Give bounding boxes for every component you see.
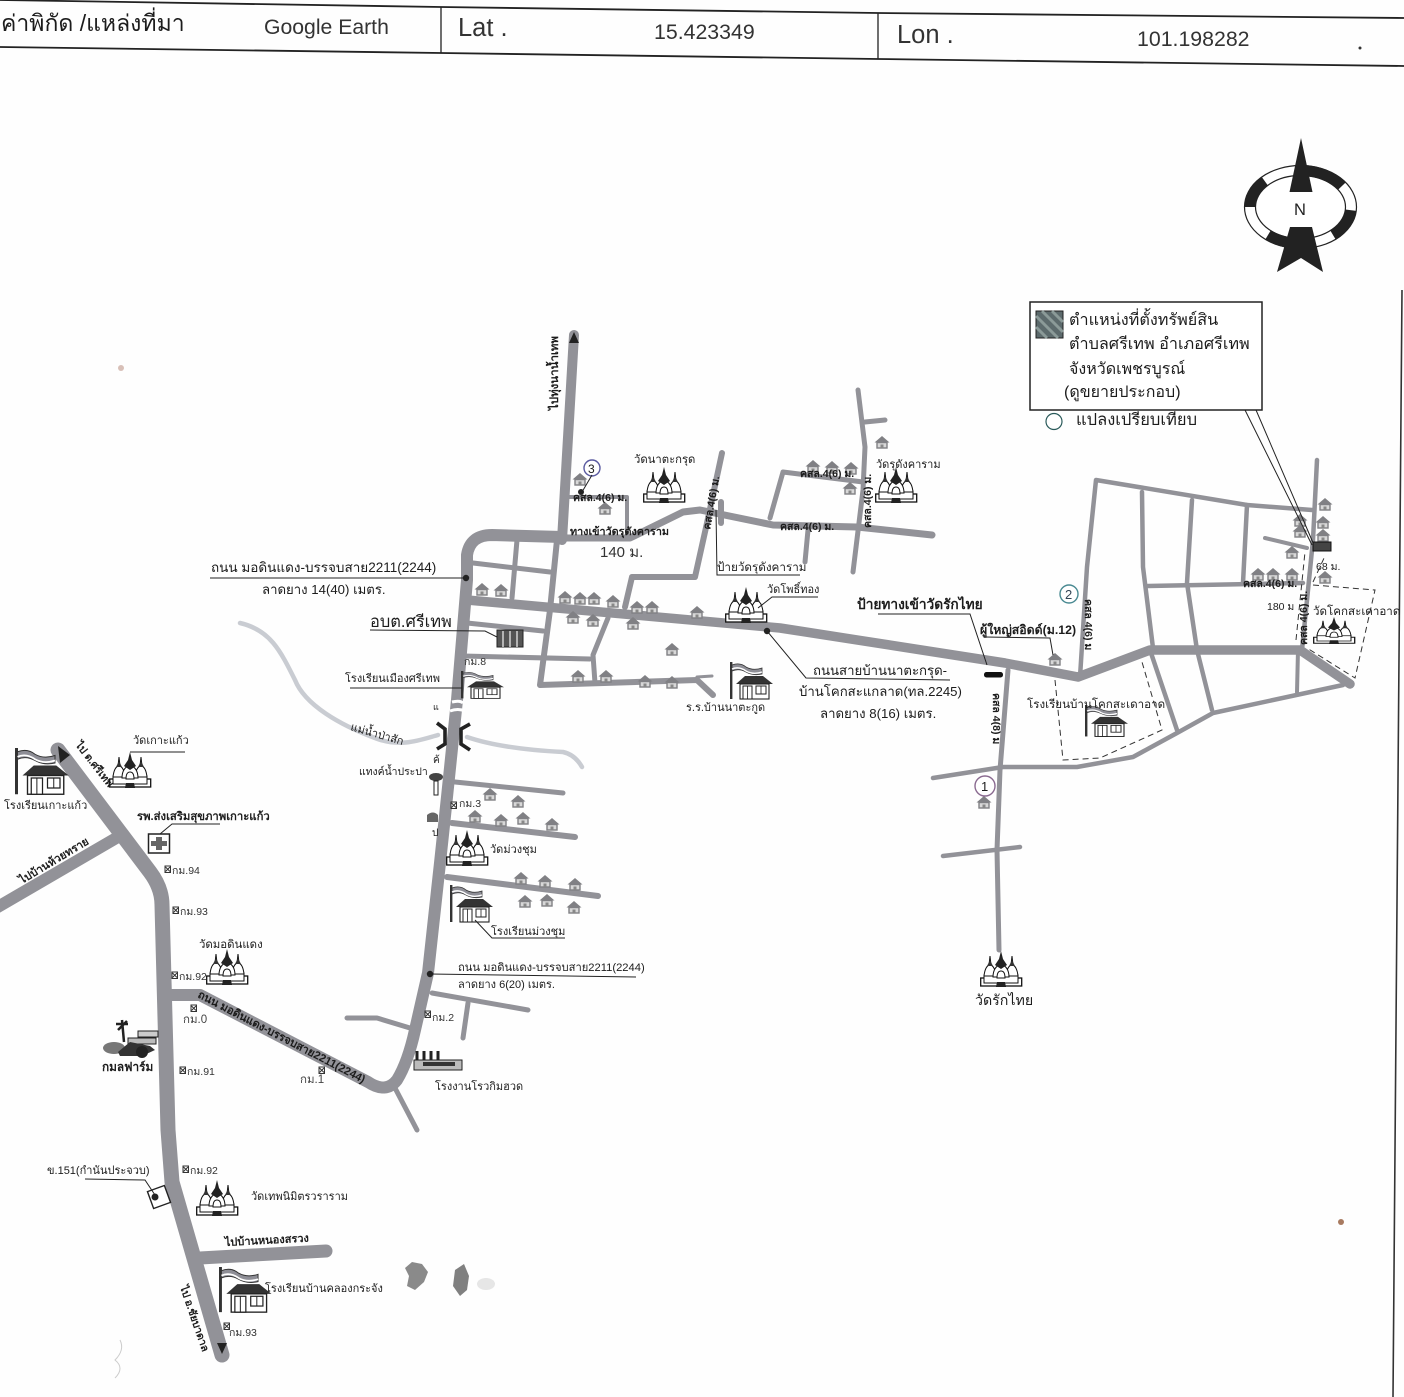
label: concrete road 5: คสล.4(6) ม. — [862, 474, 874, 528]
road: north road — [562, 335, 574, 540]
label: โรงเรียนเมืองศรีเทพ — [345, 671, 440, 685]
callout: road 2245: ลาดยาง 8(16) เมตร. — [820, 706, 936, 721]
marker km 93 south: กม.93 — [229, 1327, 257, 1339]
callout: road 2245: ถนนสายบ้านนาตะกรุด- — [813, 663, 947, 679]
stray roadside characters: ป — [432, 828, 438, 839]
road: to Ban Nong Suang — [200, 1251, 326, 1258]
callout: Rak Thai entrance sign — [857, 596, 1003, 678]
temple: Wat Mo Din Daeng — [199, 938, 263, 985]
icon: health centre — [137, 810, 270, 853]
icon: Kamon farm — [102, 1020, 158, 1074]
label: ร.ร.บ้านนาตะกูด — [686, 702, 765, 714]
label: วัดโคกสะเดาอาด — [1313, 604, 1400, 618]
village houses — [468, 436, 1332, 913]
label: concrete road 7: คสล 4(8) ม — [990, 693, 1002, 744]
label: วัดรุดังคาราม — [876, 459, 941, 471]
marker km 1: กม.1 — [300, 1074, 324, 1086]
comparable 3 — [578, 460, 600, 495]
marker km 93 south — [224, 1323, 257, 1339]
label: to Huai Sai: ไปบ้านห้วยทราย — [15, 834, 91, 888]
legend text — [1064, 308, 1250, 402]
label: รพ.ส่งเสริมสุขภาพเกาะแก้ว — [137, 810, 270, 824]
river: Pa Sak — [240, 623, 582, 767]
page right border — [1393, 290, 1402, 1397]
callout: highway 2211 south: ถนน มอดินแดง-บรรจบสาย2211(2244) — [458, 962, 645, 974]
label: โรงเรียนบ้านโคกสะเดาอาด — [1027, 697, 1165, 711]
marker km 92: กม.92 — [179, 971, 207, 983]
school: Khlong Krachang — [219, 1267, 383, 1312]
road arrows — [58, 332, 579, 1354]
icon: north compass — [1244, 138, 1356, 272]
callout: village headman — [980, 622, 1076, 655]
stray roadside characters: ค้ — [433, 754, 440, 766]
temple: Wat Rudangkharam — [876, 459, 941, 503]
header table — [0, 0, 1404, 66]
marker km 92 south: กม.92 — [190, 1165, 218, 1177]
header: source label: ค่าพิกัด /แหล่งที่มา — [1, 7, 185, 36]
icon: house number 151 — [47, 1165, 171, 1209]
comparable 1: 1 — [981, 779, 988, 794]
marker km 0 — [183, 1005, 207, 1026]
temple: Wat Pho Thong — [726, 581, 819, 623]
callout: highway 2211 north — [210, 560, 469, 597]
icon: subdistrict office — [370, 613, 523, 647]
label: โรงงานโรวกิมฮวด — [435, 1079, 523, 1093]
legend swatch — [1036, 311, 1063, 338]
road: to Ban Huai Sai — [0, 837, 118, 908]
comparable plots — [578, 460, 1078, 796]
label: concrete road 6: คสล 4(6) ม — [1082, 599, 1094, 650]
road labels — [15, 336, 1340, 1353]
school: Ko Kaeo — [4, 748, 87, 812]
comparable 2 — [1060, 585, 1078, 603]
comparable 3: 3 — [588, 462, 595, 476]
stray roadside characters — [427, 702, 440, 839]
dashed land boundaries — [1055, 552, 1375, 760]
label: แทงค์น้ำประปา — [359, 764, 428, 778]
label: โรงเรียนเกาะแก้ว — [4, 798, 87, 812]
kilometre markers — [165, 656, 486, 1339]
road: highway 2211 — [170, 535, 562, 1088]
callout: highway 2211 north: ถนน มอดินแดง-บรรจบสาย2211(2244) — [211, 560, 436, 575]
marker km 94: กม.94 — [172, 865, 200, 877]
icon: water tank — [359, 764, 443, 795]
label: วัดนาตะกรุด — [634, 454, 695, 466]
label: to Si Thep: ไป ต.ศรีเทพ — [72, 738, 116, 790]
legend text: (ดูขยายประกอบ) — [1064, 384, 1181, 402]
label: north road: ไปทุ่งนาน้ำเทพ — [545, 336, 562, 412]
school: Ban Na Takut — [686, 662, 773, 714]
label: วัดเทพนิมิตรวราราม — [251, 1191, 348, 1203]
label: concrete road 2: คสล.4(6) ม. — [701, 475, 722, 531]
callout: Rudangkharam sign — [716, 510, 806, 575]
label: วัดโพธิ์ทอง — [767, 581, 819, 596]
label: concrete road 1: คสล.4(6) ม. — [573, 492, 627, 504]
callout: highway 2211 south — [427, 962, 645, 991]
legend text: ตำแหน่งที่ตั้งทรัพย์สิน — [1069, 308, 1218, 329]
label: วัดเกาะแก้ว — [133, 735, 189, 747]
temple: Wat Rak Thai — [975, 951, 1033, 1009]
label: distance 180 m: 180 ม — [1267, 601, 1294, 613]
school: Mueang Si Thep — [345, 671, 504, 698]
marker km 2: กม.2 — [432, 1012, 454, 1024]
callout: highway 2211 south: ลาดยาง 6(20) เมตร. — [458, 979, 555, 991]
bridge — [437, 701, 470, 750]
road: western highway — [58, 750, 222, 1355]
label: to Nong Suang: ไปบ้านหนองสรวง — [222, 1231, 309, 1249]
label: entrance road: ทางเข้าวัดรุดังคาราม — [570, 525, 669, 539]
marker km 3: กม.3 — [459, 798, 481, 810]
label: distance 68 m: 68 ม. — [1316, 561, 1340, 573]
label: ข.151(กำนันประจวบ) — [47, 1165, 150, 1177]
callout: Rak Thai entrance sign: ป้ายทางเข้าวัดรักไทย — [857, 596, 983, 612]
label: อบต.ศรีเทพ — [370, 613, 452, 631]
callout: road 2245: บ้านโคกสะแกลาด(ทล.2245) — [799, 684, 962, 699]
road: main east road — [467, 600, 1350, 684]
header: source value: Google Earth — [264, 16, 389, 39]
header: latitude value: 15.423349 — [654, 20, 755, 44]
marker km 1 — [300, 1067, 324, 1086]
school: Ban Khok Sadao At — [1027, 697, 1165, 736]
callout: Rudangkharam sign: ป้ายวัดรุดังคาราม — [717, 561, 806, 574]
label: concrete road 9: คสล.4(6) ม. — [1243, 578, 1297, 590]
label: โรงเรียนม่วงชุม — [491, 924, 565, 938]
compass letter: N — [1294, 201, 1306, 219]
label: concrete road 3: คสล.4(6) ม. — [780, 521, 834, 533]
legend box — [1030, 302, 1262, 410]
marker km 91: กม.91 — [187, 1066, 215, 1078]
road: local grid — [347, 390, 1343, 1130]
marker km 2 — [425, 1011, 454, 1024]
header: longitude label: Lon . — [897, 21, 954, 49]
road network — [0, 335, 1350, 1355]
marker km 93: กม.93 — [180, 906, 208, 918]
comparable 2: 2 — [1065, 587, 1072, 602]
callout: highway 2211 north: ลาดยาง 14(40) เมตร. — [262, 582, 386, 597]
label: วัดรักไทย — [975, 992, 1033, 1009]
school: Muang Chum — [450, 885, 565, 938]
label: วัดม่วงชุม — [490, 844, 537, 856]
label: วัดมอดินแดง — [199, 938, 263, 951]
label: โรงเรียนบ้านคลองกระจัง — [265, 1281, 383, 1295]
label: to Chai Badan: ไป อ.ชัยบาดาล — [177, 1283, 212, 1353]
callout: village headman: ผู้ใหญ่สอิดด์(ม.12) — [980, 622, 1076, 638]
marker km 0: กม.0 — [183, 1014, 207, 1026]
stray roadside characters: แ — [433, 702, 439, 712]
label: กมลฟาร์ม — [102, 1060, 153, 1074]
legend: comparable plot: แปลงเปรียบเทียบ — [1076, 411, 1197, 429]
comparable 1 — [975, 776, 995, 796]
temple: Wat Na Takrut — [634, 454, 695, 503]
temple: Wat Muang Chum — [447, 830, 537, 866]
label: distance 140 m: 140 ม. — [600, 544, 643, 561]
callout: road 2245 — [764, 628, 962, 721]
legend text: ตำบลศรีเทพ อำเภอศรีเทพ — [1069, 335, 1250, 353]
header: latitude label: Lat . — [458, 14, 508, 42]
temple: Wat Thep Nimit — [197, 1180, 348, 1216]
label: river: แม่น้ำป่าสัก — [349, 718, 406, 748]
label: concrete road 8: คสล 4(6) ม. — [1298, 591, 1310, 645]
subject property marker and leader lines — [1245, 410, 1331, 551]
icon: factory — [414, 1051, 523, 1093]
temple: Wat Khok Sadao At — [1313, 604, 1400, 644]
temple: Wat Ko Kaeo — [110, 735, 189, 788]
header: longitude value: 101.198282 — [1137, 27, 1250, 51]
label: concrete road 4: คสล.4(6) ม. — [800, 468, 854, 480]
label: road along highway: ถนน มอดินแดง-บรรจบสาย2211(2244) — [196, 988, 368, 1086]
marker km 8: กม.8 — [464, 656, 486, 668]
legend text: จังหวัดเพชรบูรณ์ — [1069, 359, 1185, 379]
